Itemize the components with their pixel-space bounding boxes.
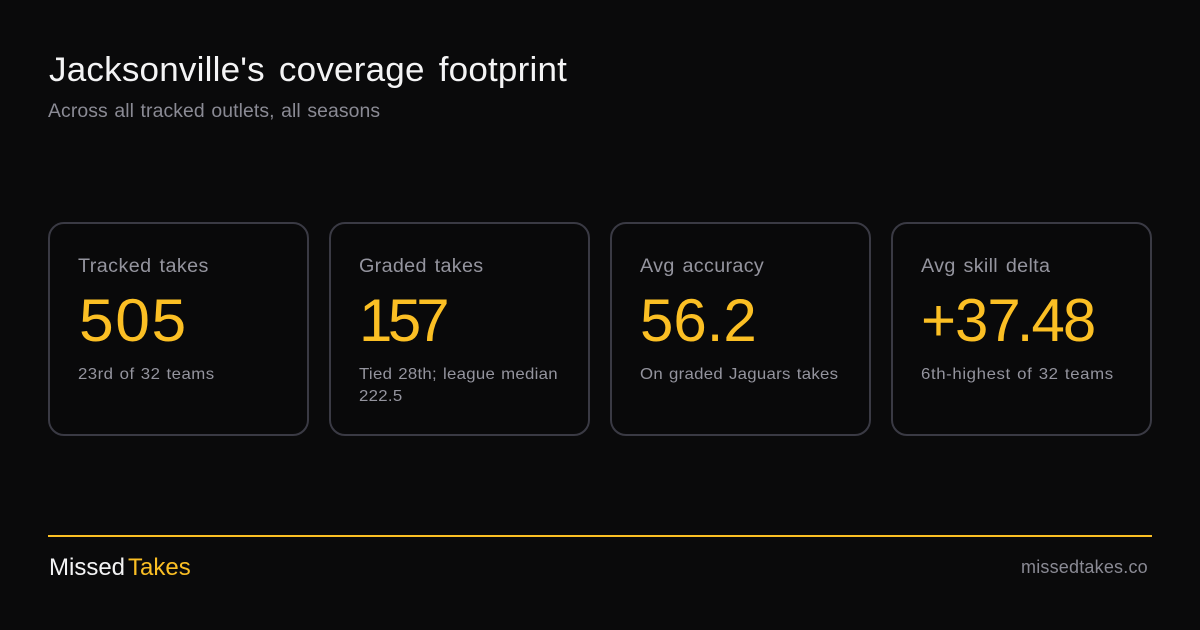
panel: avg accuracy bbox=[610, 222, 871, 436]
note: Tied 28th; league median bbox=[359, 366, 558, 383]
panel: graded takes bbox=[329, 222, 590, 436]
site url: missedtakes.co bbox=[1021, 557, 1148, 577]
label: Tracked takes bbox=[78, 256, 209, 277]
note: On graded Jaguars takes bbox=[640, 366, 838, 383]
value: +37.48 bbox=[921, 287, 1096, 354]
value: 505 bbox=[79, 287, 188, 354]
note: 23rd of 32 teams bbox=[78, 366, 215, 383]
title: Jacksonville's coverage footprint bbox=[49, 51, 567, 89]
panel: avg skill delta bbox=[891, 222, 1152, 436]
note: 6th-highest of 32 teams bbox=[921, 366, 1114, 383]
value: 157 bbox=[359, 287, 450, 354]
note: 222.5 bbox=[359, 388, 402, 405]
subtitle: Across all tracked outlets, all seasons bbox=[48, 101, 380, 122]
note bbox=[359, 366, 558, 405]
label: Graded takes bbox=[359, 256, 483, 277]
label: Avg skill delta bbox=[921, 256, 1050, 277]
value: 56.2 bbox=[640, 287, 757, 354]
panel: tracked takes bbox=[48, 222, 309, 436]
brand wordmark: MissedTakes bbox=[49, 554, 191, 581]
label: Avg accuracy bbox=[640, 256, 764, 277]
footer rule bbox=[48, 535, 1152, 537]
